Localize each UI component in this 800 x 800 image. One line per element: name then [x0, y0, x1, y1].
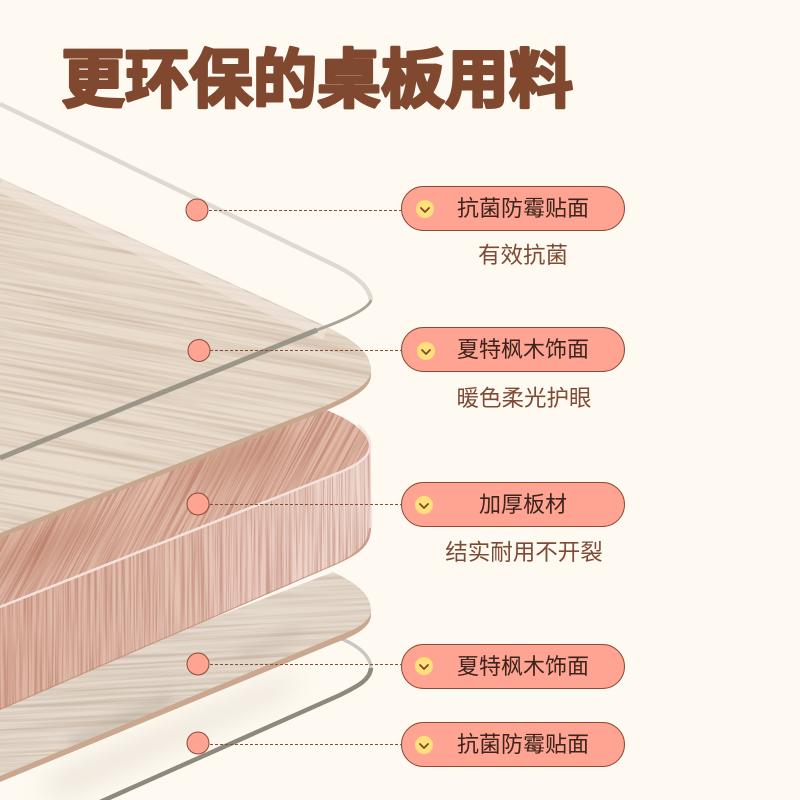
check icon: [417, 342, 435, 360]
marker dot: [187, 493, 209, 515]
marker dot: [187, 732, 209, 754]
pill label: [402, 328, 624, 372]
pill text: 夏特枫木饰面: [457, 337, 589, 362]
callout 4: lower veneer: [187, 644, 624, 688]
pill label: [402, 644, 624, 688]
marker dot: [188, 340, 210, 362]
pill text: 抗菌防霉贴面: [457, 196, 589, 221]
pill text: 加厚板材: [479, 492, 567, 517]
description: 结实耐用不开裂: [445, 540, 603, 565]
layer: thick board: [0, 410, 372, 710]
callout 1: top film: [186, 186, 624, 268]
illustration: exploded tabletop layers: [0, 102, 374, 800]
pill label: [402, 722, 624, 766]
pill label: [402, 482, 624, 526]
callout 2: upper veneer: [188, 328, 624, 411]
layer: bottom anti-bacterial film: [100, 637, 371, 800]
callout 3: thick board: [187, 482, 624, 565]
pill text: 夏特枫木饰面: [457, 654, 589, 679]
marker dot: [186, 199, 208, 221]
description: 暖色柔光护眼: [456, 386, 592, 411]
title: 更环保的桌板用料: [61, 44, 573, 116]
check icon: [415, 736, 433, 754]
layer: upper maple veneer: [0, 178, 371, 538]
pill text: 抗菌防霉贴面: [457, 732, 589, 757]
shadow under lower wood panel: [40, 672, 300, 795]
description: 有效抗菌: [478, 243, 568, 268]
check icon: [416, 200, 434, 218]
check icon: [415, 657, 433, 675]
check icon: [415, 496, 433, 514]
pill label: [402, 186, 624, 230]
layer: top anti-bacterial film: [0, 104, 371, 458]
marker dot: [187, 653, 209, 675]
layer: lower maple veneer: [0, 572, 371, 782]
callout 5: bottom film: [187, 722, 624, 766]
